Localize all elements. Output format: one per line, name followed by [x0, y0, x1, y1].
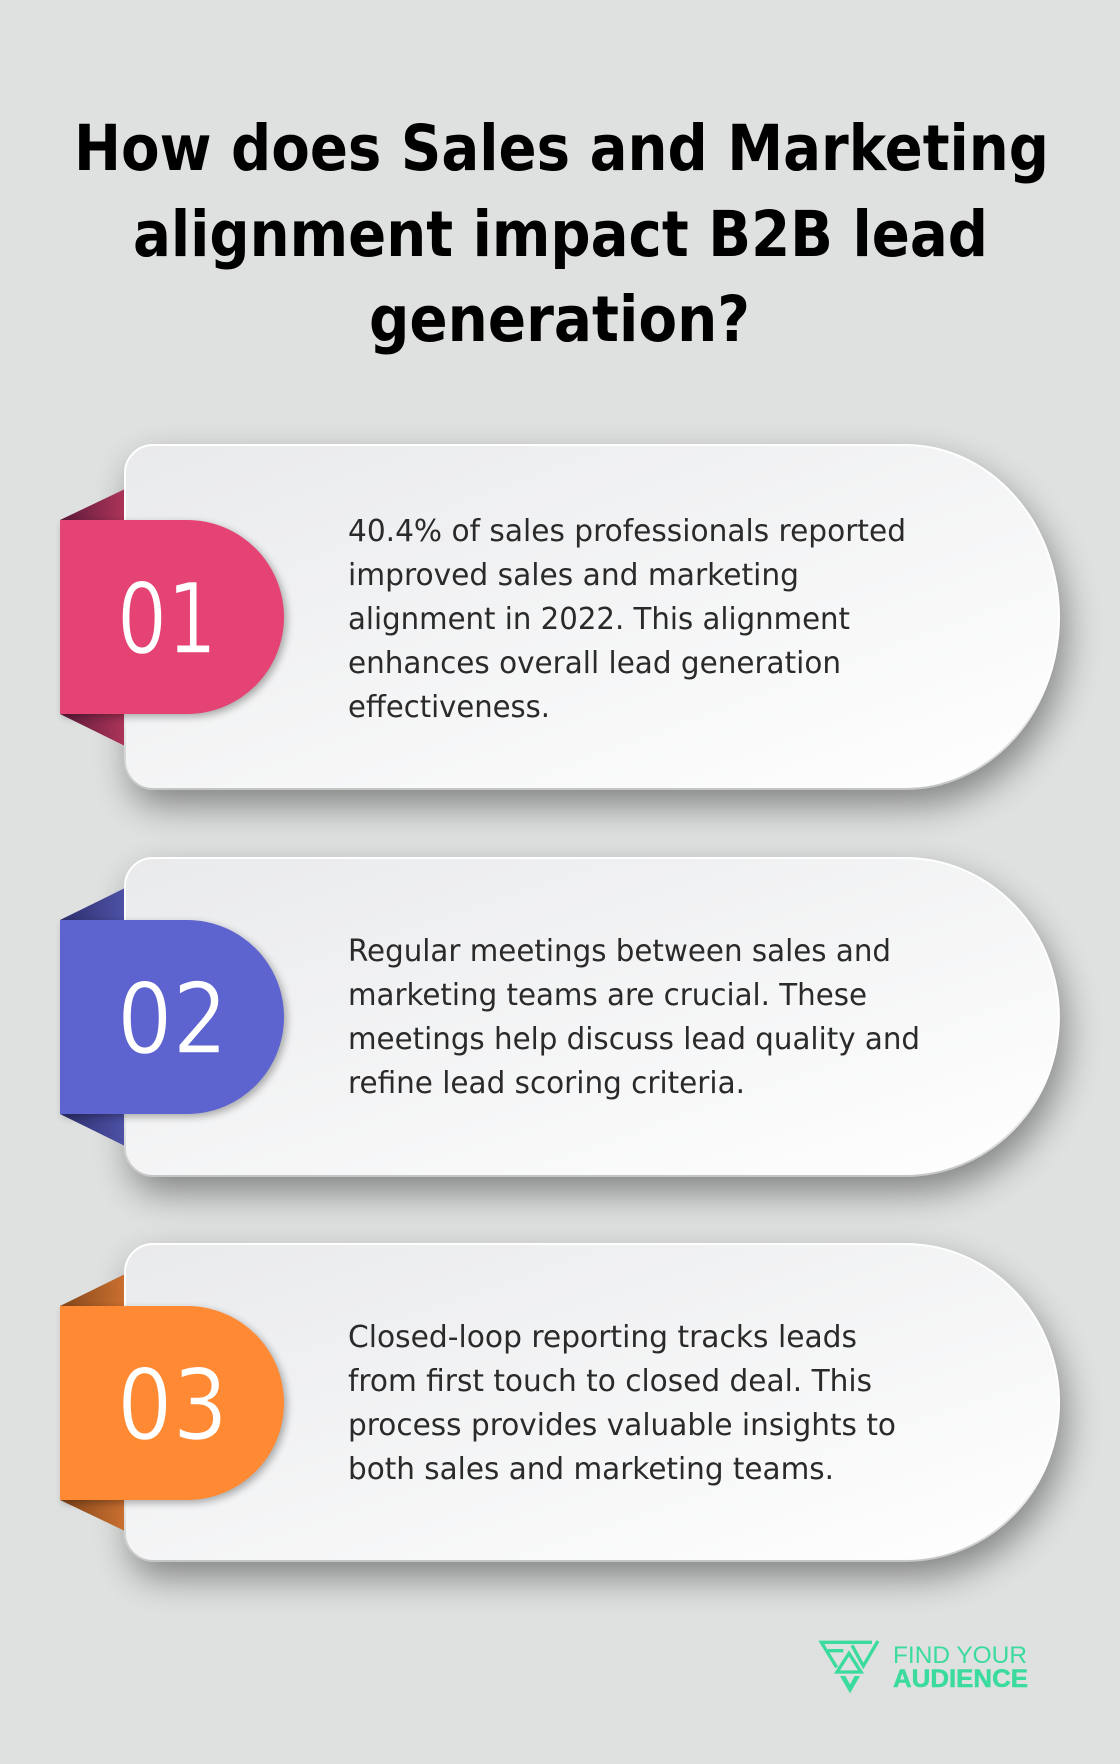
number 03: 03 — [117, 1349, 228, 1463]
text: step 02: refine lead scoring criteria. — [348, 1066, 745, 1101]
panel: step 01 — [60, 445, 1065, 805]
panel: step 03 — [60, 1244, 1065, 1577]
badge: step 03 — [60, 1306, 284, 1500]
text: step 01: 40.4% of sales professionals reported — [348, 514, 906, 549]
text: step 03: process provides valuable insights to — [348, 1408, 896, 1443]
text: step 01 — [348, 514, 906, 725]
logo wordmark — [893, 1642, 1028, 1693]
title — [74, 112, 1049, 356]
number 02: 02 — [117, 963, 228, 1077]
text: step 02: marketing teams are crucial. These — [348, 978, 867, 1013]
logo wordmark: AUDIENCE — [893, 1665, 1028, 1693]
panel: step 02 — [60, 858, 1065, 1192]
icon: logo mark — [821, 1641, 878, 1693]
logo: Find Your Audience — [821, 1641, 1028, 1693]
text: step 01: effectiveness. — [348, 690, 550, 725]
text: step 02: meetings help discuss lead quality and — [348, 1022, 920, 1057]
card: step 01 — [125, 445, 1059, 789]
card: step 03 — [125, 1244, 1059, 1561]
text: step 03 — [348, 1320, 896, 1487]
title: alignment impact B2B lead — [133, 198, 988, 271]
number 01: 01 — [117, 563, 217, 677]
text: step 01: alignment in 2022. This alignment — [348, 602, 850, 637]
badge: step 02 — [60, 920, 284, 1114]
card: step 02 — [125, 858, 1059, 1176]
ribbon fold: step 02 — [60, 888, 125, 1146]
text: step 02 — [348, 934, 920, 1101]
text: step 01: improved sales and marketing — [348, 558, 799, 593]
ribbon fold: step 01 — [60, 489, 125, 746]
text: step 01: enhances overall lead generation — [348, 646, 841, 681]
text: step 03: Closed-loop reporting tracks leads — [348, 1320, 857, 1355]
ribbon fold: step 03 — [60, 1274, 125, 1531]
text: step 02: Regular meetings between sales and — [348, 934, 891, 969]
logo wordmark: FIND YOUR — [893, 1642, 1027, 1669]
badge: step 01 — [60, 520, 284, 714]
title: generation? — [369, 283, 750, 356]
text: step 03: both sales and marketing teams. — [348, 1452, 834, 1487]
text: step 03: from first touch to closed deal. This — [348, 1364, 872, 1399]
